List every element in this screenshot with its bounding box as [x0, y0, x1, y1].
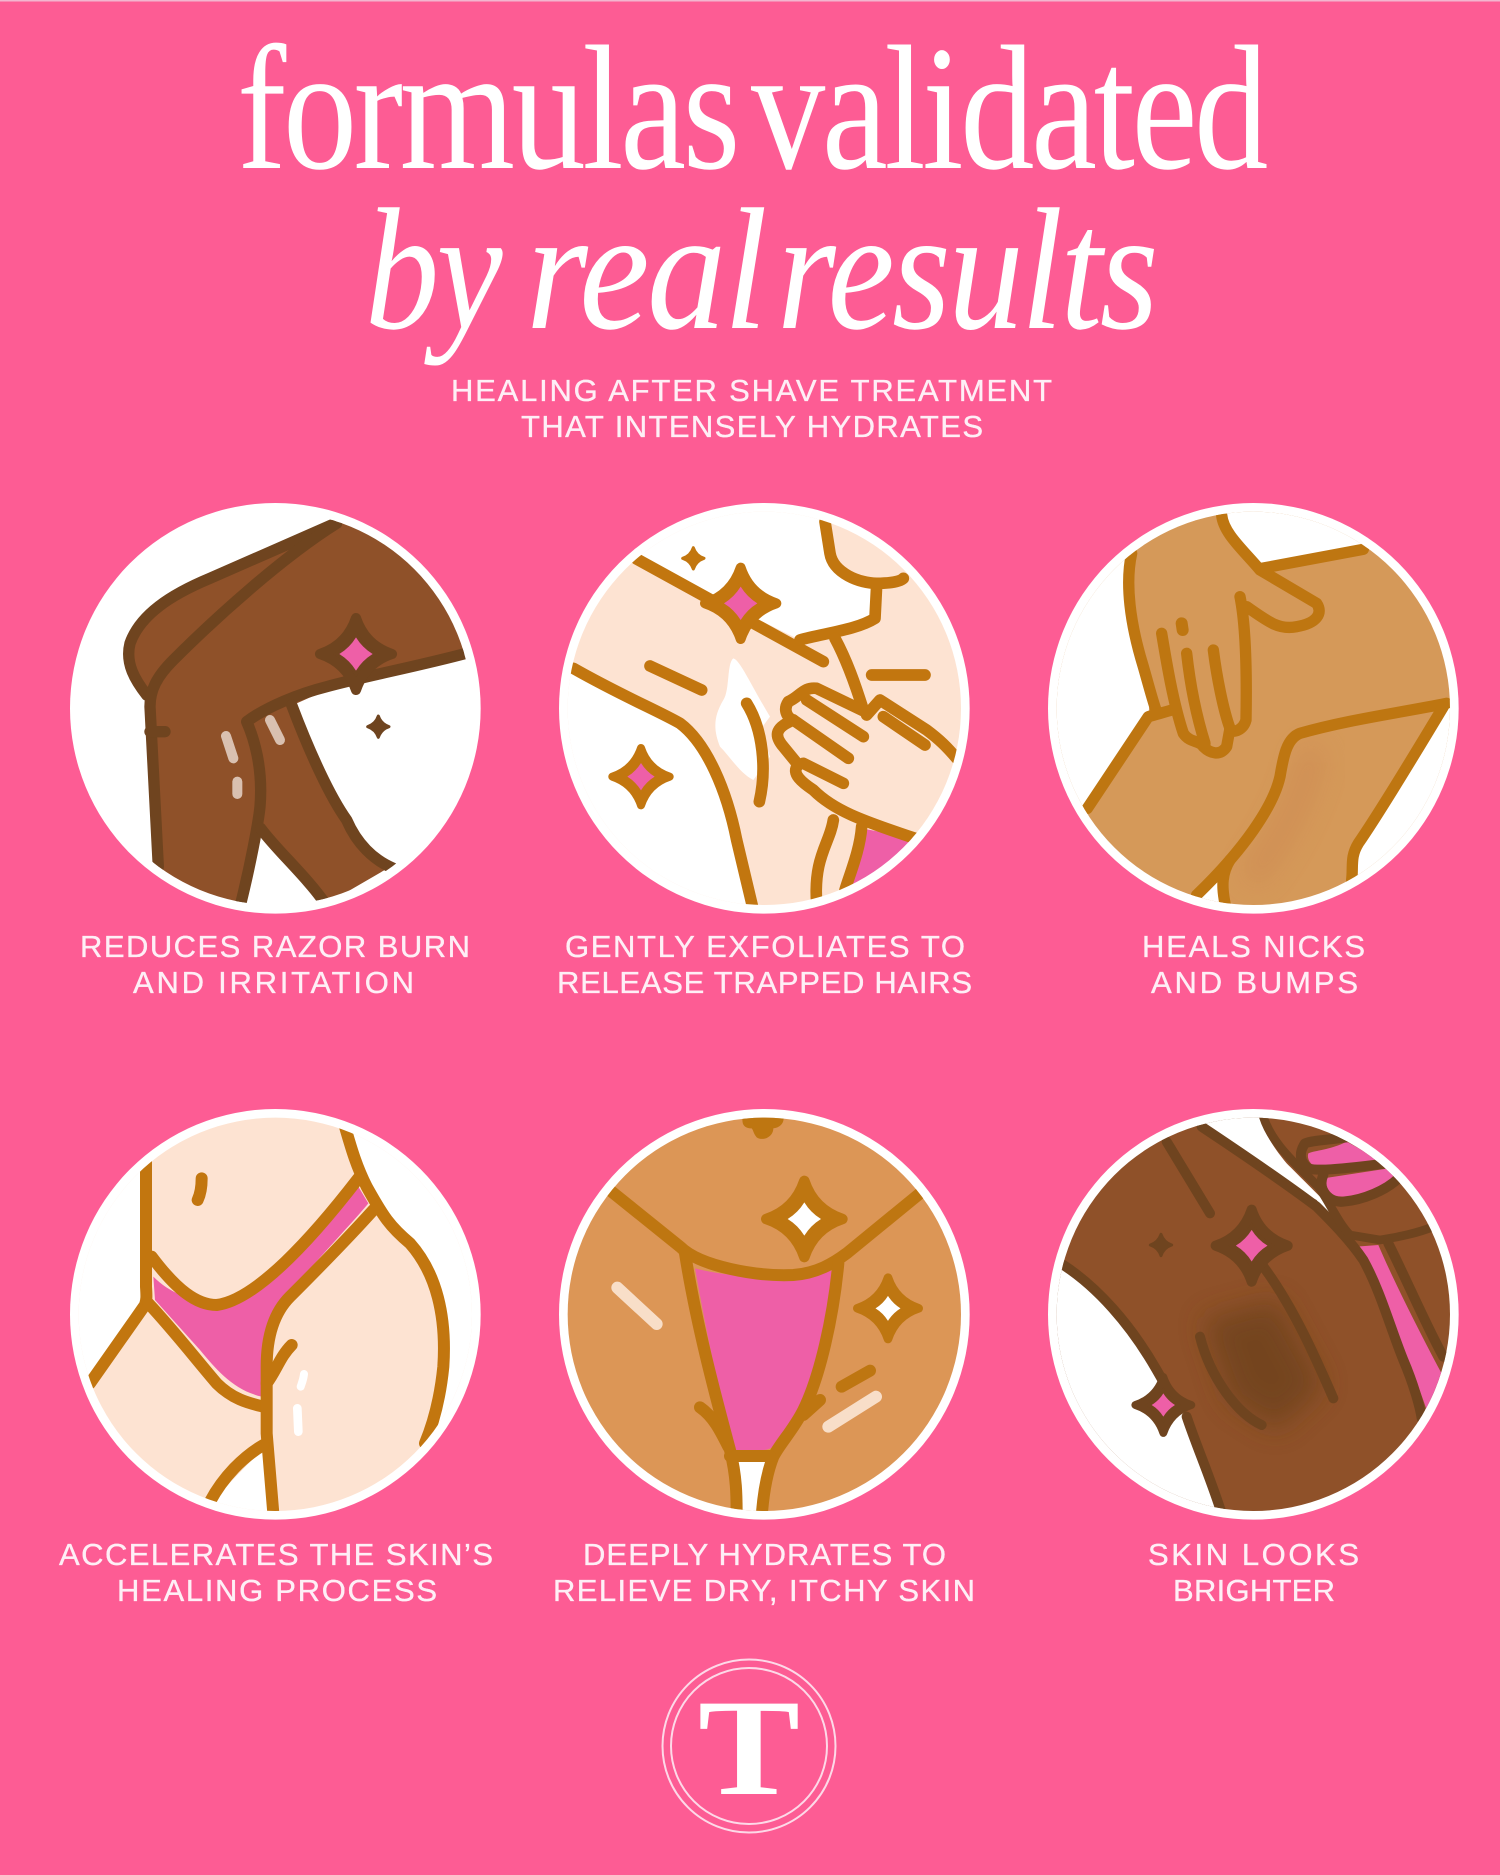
- subtitle: HEALING AFTER SHAVE TREATMENT: [451, 373, 1052, 408]
- icon: small sparkle: [1150, 1234, 1172, 1256]
- label: gently exfoliates: GENTLY EXFOLIATES TO: [565, 929, 965, 964]
- logo: T monogram: T: [698, 1671, 800, 1824]
- panel: accelerates healing: [70, 1109, 483, 1523]
- label: deeply hydrates: [553, 1537, 975, 1608]
- title: real: [526, 173, 765, 366]
- label: deeply hydrates: RELIEVE DRY, ITCHY SKIN: [553, 1573, 975, 1608]
- icon: big sparkle: [1216, 1210, 1288, 1282]
- icon: medium sparkle: [857, 1278, 919, 1339]
- icon: sparkle: [320, 618, 392, 690]
- label: deeply hydrates: DEEPLY HYDRATES TO: [583, 1537, 946, 1572]
- panel: heals nicks: [1047, 503, 1463, 917]
- title: results: [777, 173, 1156, 366]
- label: skin looks brighter: BRIGHTER: [1173, 1573, 1335, 1608]
- label: heals nicks: [1142, 929, 1365, 1000]
- title: formulas: [237, 9, 737, 207]
- label: heals nicks: HEALS NICKS: [1142, 929, 1365, 964]
- icon: big sparkle: [705, 568, 776, 639]
- icon: lower sparkle: [1135, 1377, 1191, 1433]
- label: accelerates healing: [59, 1537, 493, 1608]
- label: gently exfoliates: [557, 929, 972, 1000]
- panel: gently exfoliates: [559, 503, 973, 917]
- panel: skin looks brighter: [1047, 1109, 1460, 1523]
- label: heals nicks: AND BUMPS: [1151, 965, 1358, 1000]
- title: by: [365, 173, 503, 366]
- panel: reduces razor burn: [70, 503, 483, 914]
- label: accelerates healing: HEALING PROCESS: [117, 1573, 437, 1608]
- label: accelerates healing: ACCELERATES THE SKIN’S: [59, 1537, 493, 1572]
- icon: big sparkle: [766, 1181, 842, 1257]
- title: [237, 9, 1267, 366]
- label: skin looks brighter: SKIN LOOKS: [1148, 1537, 1359, 1572]
- title: validated: [751, 9, 1267, 207]
- label: gently exfoliates: RELEASE TRAPPED HAIRS: [557, 965, 972, 1000]
- label: reduces razor burn: REDUCES RAZOR BURN: [80, 929, 470, 964]
- icon: medium sparkle: [612, 748, 670, 805]
- logo: T monogram: [662, 1660, 836, 1832]
- panel: deeply hydrates: [559, 1109, 973, 1523]
- subtitle: [451, 373, 1052, 444]
- label: reduces razor burn: AND IRRITATION: [133, 965, 414, 1000]
- label: skin looks brighter: [1148, 1537, 1359, 1608]
- icon: small sparkle: [368, 716, 389, 737]
- icon: small sparkle: [683, 548, 704, 569]
- label: reduces razor burn: [80, 929, 470, 1000]
- subtitle: THAT INTENSELY HYDRATES: [521, 409, 983, 444]
